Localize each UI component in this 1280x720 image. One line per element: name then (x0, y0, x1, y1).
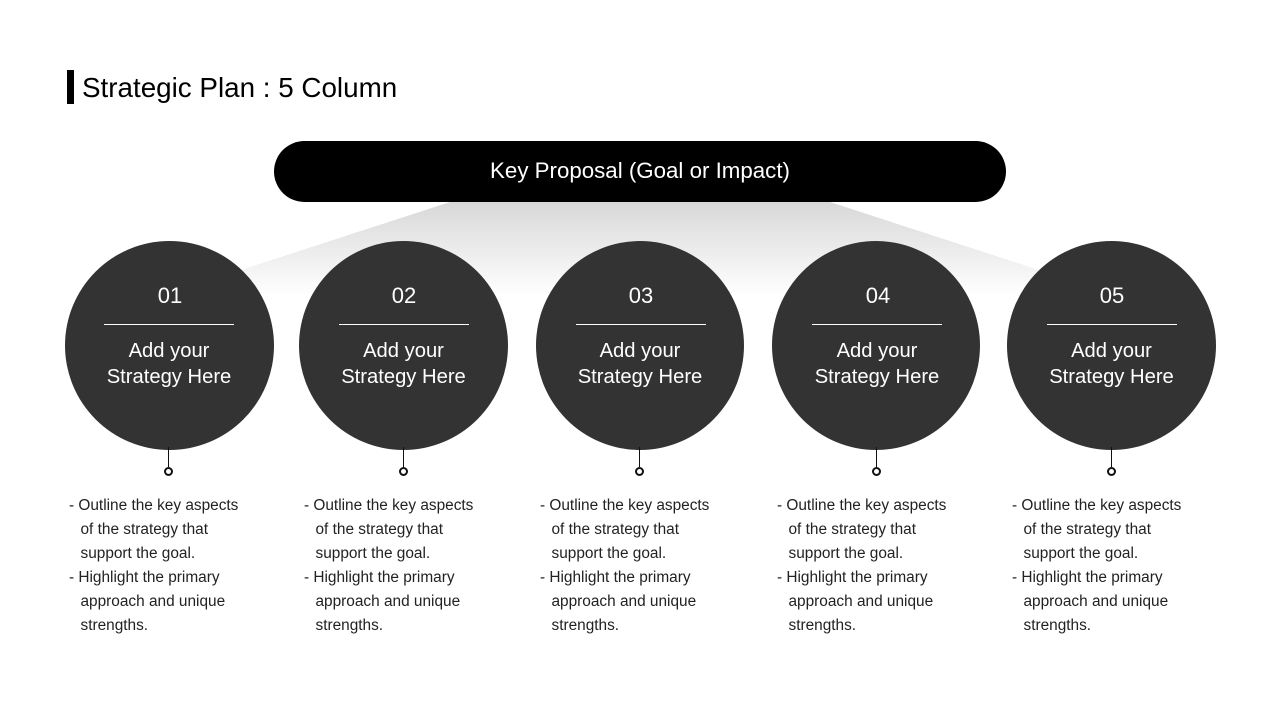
text 2: - Outline the key aspects (304, 497, 473, 514)
text 1: approach and unique (80, 593, 225, 610)
text 4: - Highlight the primary (777, 569, 928, 586)
text 5 (1012, 497, 1181, 634)
text 4 (777, 497, 946, 634)
text 5: - Outline the key aspects (1012, 497, 1181, 514)
text 3 (540, 497, 709, 634)
text 3: of the strategy that (552, 521, 679, 538)
key proposal banner (274, 141, 1006, 202)
circle 5: 05 (1100, 283, 1124, 308)
circle 3: Add your (600, 340, 680, 362)
text 4: support the goal. (788, 545, 903, 562)
text 3: - Highlight the primary (540, 569, 691, 586)
circle 4: 04 (866, 283, 890, 308)
circle 5 (1007, 241, 1216, 450)
circle 3 (536, 241, 744, 450)
text 3: - Outline the key aspects (540, 497, 709, 514)
title: Strategic Plan : 5 Column (82, 72, 397, 103)
connector 4 (872, 447, 881, 476)
circle 2: Add your (363, 340, 444, 362)
connector 2 (399, 447, 408, 476)
text 2 (304, 497, 473, 634)
connector 3 (635, 447, 644, 476)
text 3: support the goal. (552, 545, 666, 562)
title accent bar (67, 70, 74, 104)
circle 3: 03 (629, 283, 653, 308)
circle 1: Add your (129, 340, 209, 362)
text 5: of the strategy that (1024, 521, 1151, 538)
text 5: strengths. (1024, 617, 1091, 634)
circle 1 (65, 241, 274, 450)
connector 1 (164, 447, 173, 476)
circle 2 (299, 241, 508, 450)
circle 2: 02 (392, 283, 416, 308)
text 1: support the goal. (80, 545, 195, 562)
connector 5 (1107, 447, 1116, 476)
circle 4: Add your (837, 340, 917, 362)
text 1: - Highlight the primary (69, 569, 220, 586)
text 4: strengths. (788, 617, 856, 634)
text 2: support the goal. (316, 545, 430, 562)
text 4: - Outline the key aspects (777, 497, 946, 514)
text 2: approach and unique (316, 593, 460, 610)
text 5: support the goal. (1024, 545, 1138, 562)
circle 1: Strategy Here (107, 366, 231, 388)
circle 4: Strategy Here (815, 366, 939, 388)
text 5: - Highlight the primary (1012, 569, 1163, 586)
text 5: approach and unique (1024, 593, 1168, 610)
circle 3: Strategy Here (578, 366, 702, 388)
text 2: strengths. (316, 617, 383, 634)
key proposal banner: Key Proposal (Goal or Impact) (490, 158, 790, 183)
circle 5: Strategy Here (1049, 366, 1174, 388)
text 1: strengths. (80, 617, 148, 634)
text 1: - Outline the key aspects (69, 497, 238, 514)
text 4: of the strategy that (788, 521, 916, 538)
text 3: approach and unique (552, 593, 696, 610)
text 1: of the strategy that (80, 521, 208, 538)
circle 5: Add your (1071, 340, 1152, 362)
text 1 (69, 497, 238, 634)
text 4: approach and unique (788, 593, 933, 610)
circle 2: Strategy Here (341, 366, 466, 388)
text 3: strengths. (552, 617, 619, 634)
text 2: - Highlight the primary (304, 569, 455, 586)
circle 4 (772, 241, 980, 450)
circle 1: 01 (158, 283, 182, 308)
text 2: of the strategy that (316, 521, 443, 538)
